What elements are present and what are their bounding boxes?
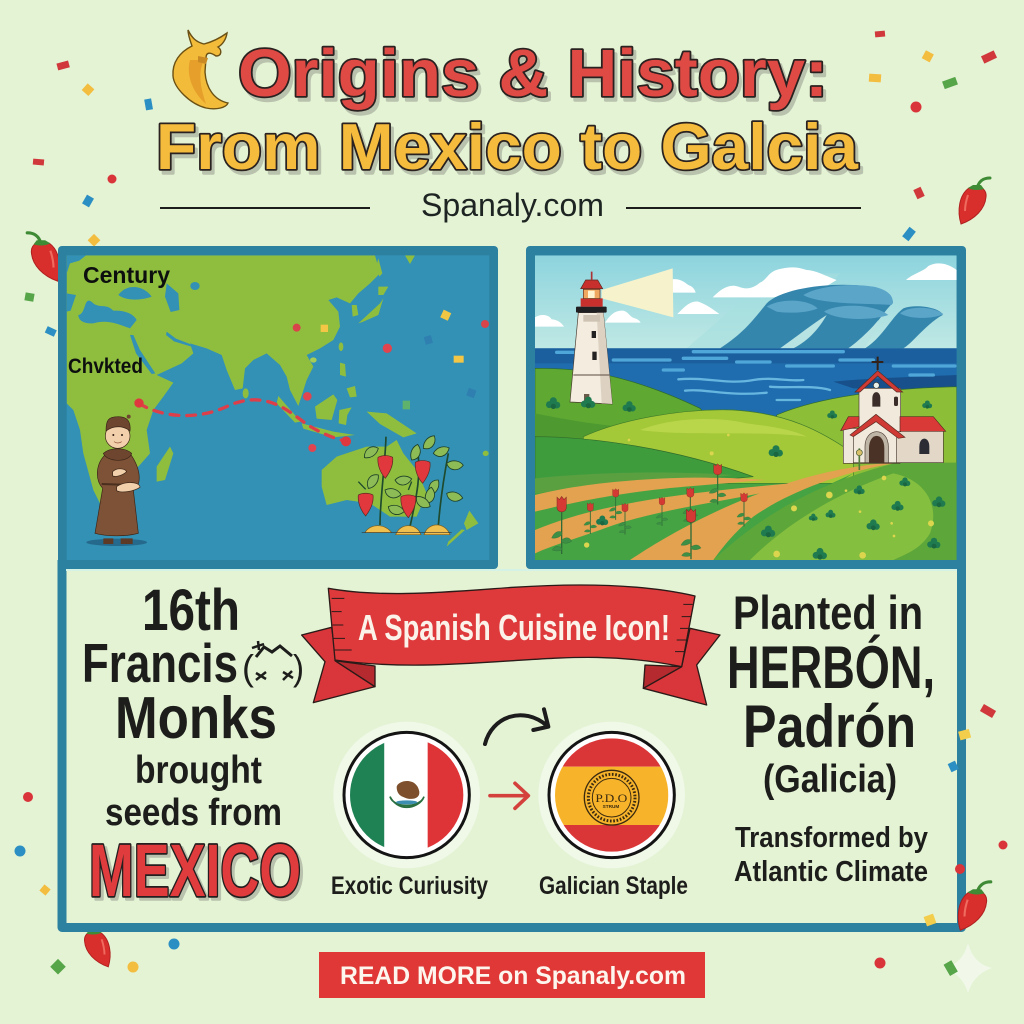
panel: Galicia landscape: [526, 246, 966, 569]
button: read more: READ MORE on Spanaly.com: [340, 962, 686, 990]
storm wave clouds: [720, 285, 943, 348]
map land: Eurasia and Africa: [67, 255, 380, 503]
pepper plants: [358, 435, 464, 535]
text block: monks: seeds from: [105, 792, 282, 834]
text block: planted in Herbón: [727, 586, 935, 888]
map confetti dots: [293, 310, 489, 452]
flag: Spain with P.D.O seal: STRUM: [603, 804, 620, 809]
icon: chili top right: [959, 178, 990, 224]
map route: dashed red line: [134, 398, 351, 446]
title: From Mexico to Galcia: [156, 110, 859, 183]
sea: [535, 348, 956, 416]
garbled glyph after Francis: (: [242, 647, 254, 688]
hills: [627, 480, 957, 560]
title: [156, 36, 859, 183]
subtitle: Spanaly.com: Spanaly.com: [421, 187, 604, 223]
flags and arrows: [333, 709, 685, 868]
garbled glyph after Francis: [242, 641, 304, 688]
text block: planted in Herbón: Padrón: [743, 693, 916, 760]
yellow wildflowers: [584, 434, 934, 559]
garbled glyph after Francis: ): [293, 647, 304, 688]
label: Galician Staple: Galician Staple: [539, 872, 688, 900]
icon: sparkle: [944, 943, 992, 993]
lighthouse: [570, 268, 673, 404]
icon: chili bottom left: [81, 923, 110, 967]
banner: A Spanish Cuisine Icon: [302, 585, 720, 705]
confetti: green: [944, 960, 958, 976]
banner: A Spanish Cuisine Icon: A Spanish Cuisine Icon!: [358, 607, 670, 648]
icon: golden chili logo: [173, 30, 228, 109]
panel: lower frame: [62, 560, 962, 928]
confetti over frame: [924, 729, 971, 926]
icon: chili left: [27, 233, 60, 281]
text block: planted in Herbón: Atlantic Climate: [734, 856, 928, 888]
church: [841, 357, 946, 470]
flowers: [552, 464, 751, 559]
flag: Mexico: [333, 722, 480, 868]
text block: planted in Herbón: Planted in: [733, 586, 923, 639]
monk figure: [86, 415, 147, 546]
panel: world map: [58, 246, 498, 569]
text block: monks: Monks: [115, 685, 277, 751]
clouds: [535, 263, 957, 327]
sky: [535, 255, 957, 349]
text block: monks: 16th: [142, 578, 240, 643]
flag: Spain with P.D.O seal: [538, 722, 685, 868]
icon: chili bottom right: [958, 882, 991, 930]
text block: monks: Francis: [82, 632, 238, 694]
text block: planted in Herbón: Transformed by: [735, 822, 928, 854]
text: MEXICO: MEXICO: [89, 829, 301, 912]
map label: Chvkted: Chvkted: [68, 355, 143, 378]
dirt paths: [535, 463, 897, 560]
foreground field: [535, 474, 853, 495]
text block: monks: brought: [135, 749, 262, 792]
text block: monks: [82, 578, 304, 834]
label: Exotic Curiusity: Exotic Curiusity: [331, 872, 488, 900]
button: read more: [319, 952, 705, 998]
flag: Spain with P.D.O seal: P.D.O: [595, 791, 628, 805]
map seas: [67, 255, 200, 374]
arrow: red: [490, 783, 528, 808]
arrow: curved black: [485, 709, 548, 744]
bushes: [546, 397, 945, 560]
text block: planted in Herbón: (Galicia): [763, 758, 897, 801]
text block: planted in Herbón: HERBÓN,: [727, 634, 935, 701]
map islands: [157, 255, 489, 547]
title: Origins & History:: [238, 36, 828, 111]
map label: Century: Century: [83, 262, 170, 288]
